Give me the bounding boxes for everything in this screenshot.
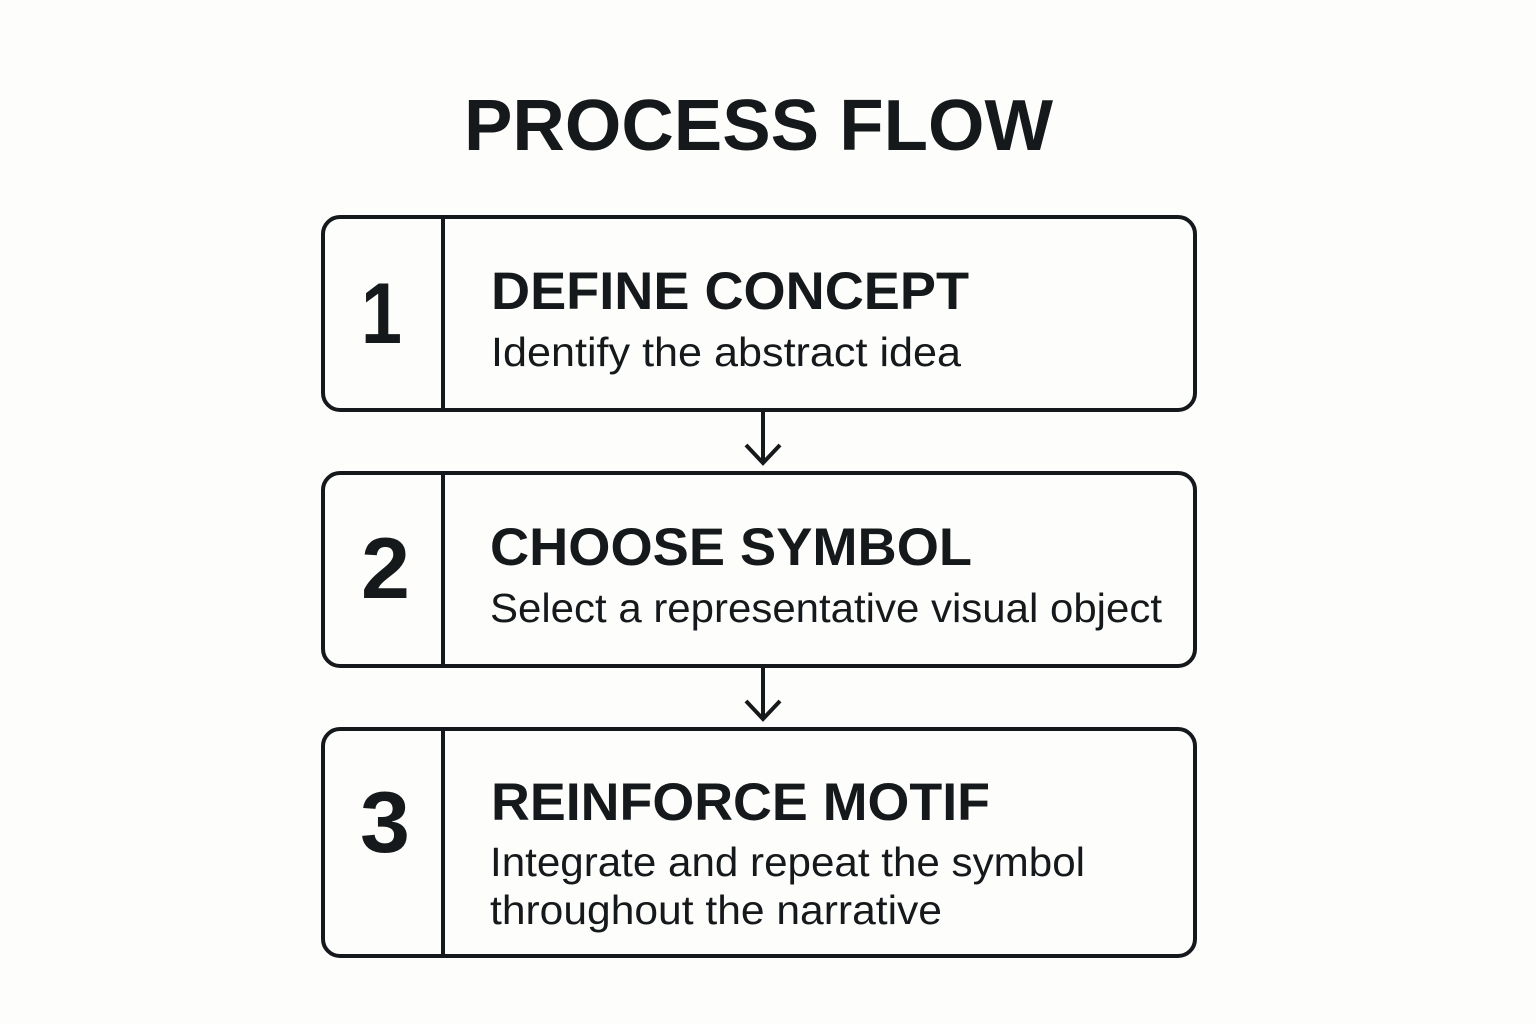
step 2 divider — [441, 473, 445, 666]
arrow: step 2 to step 3 — [746, 666, 780, 719]
panel: step 3 reinforce motif — [323, 729, 1195, 956]
title: PROCESS FLOW — [464, 86, 1053, 166]
step 1 description: Identify the abstract idea — [491, 329, 961, 375]
step 3 box — [323, 729, 1195, 956]
step 2 heading: CHOOSE SYMBOL — [490, 518, 972, 577]
step 3 heading: REINFORCE MOTIF — [491, 773, 990, 832]
step 1 divider — [441, 217, 445, 410]
step 3 description: Integrate and repeat the symbol — [490, 839, 1085, 885]
step 3 description: throughout the narrative — [490, 887, 942, 933]
step 3 divider — [441, 729, 445, 956]
step 2 description: Select a representative visual object — [490, 585, 1163, 631]
step 3 number: 3 — [360, 775, 410, 871]
arrow: step 1 to step 2 — [746, 410, 780, 463]
panel: step 1 define concept — [323, 217, 1195, 410]
step 1 number: 1 — [361, 266, 402, 362]
step 2 number: 2 — [361, 521, 410, 617]
step 3 description — [490, 839, 1085, 933]
panel: step 2 choose symbol — [323, 473, 1195, 666]
step 2 box — [323, 473, 1195, 666]
step 1 box — [323, 217, 1195, 410]
step 1 heading: DEFINE CONCEPT — [491, 262, 969, 321]
